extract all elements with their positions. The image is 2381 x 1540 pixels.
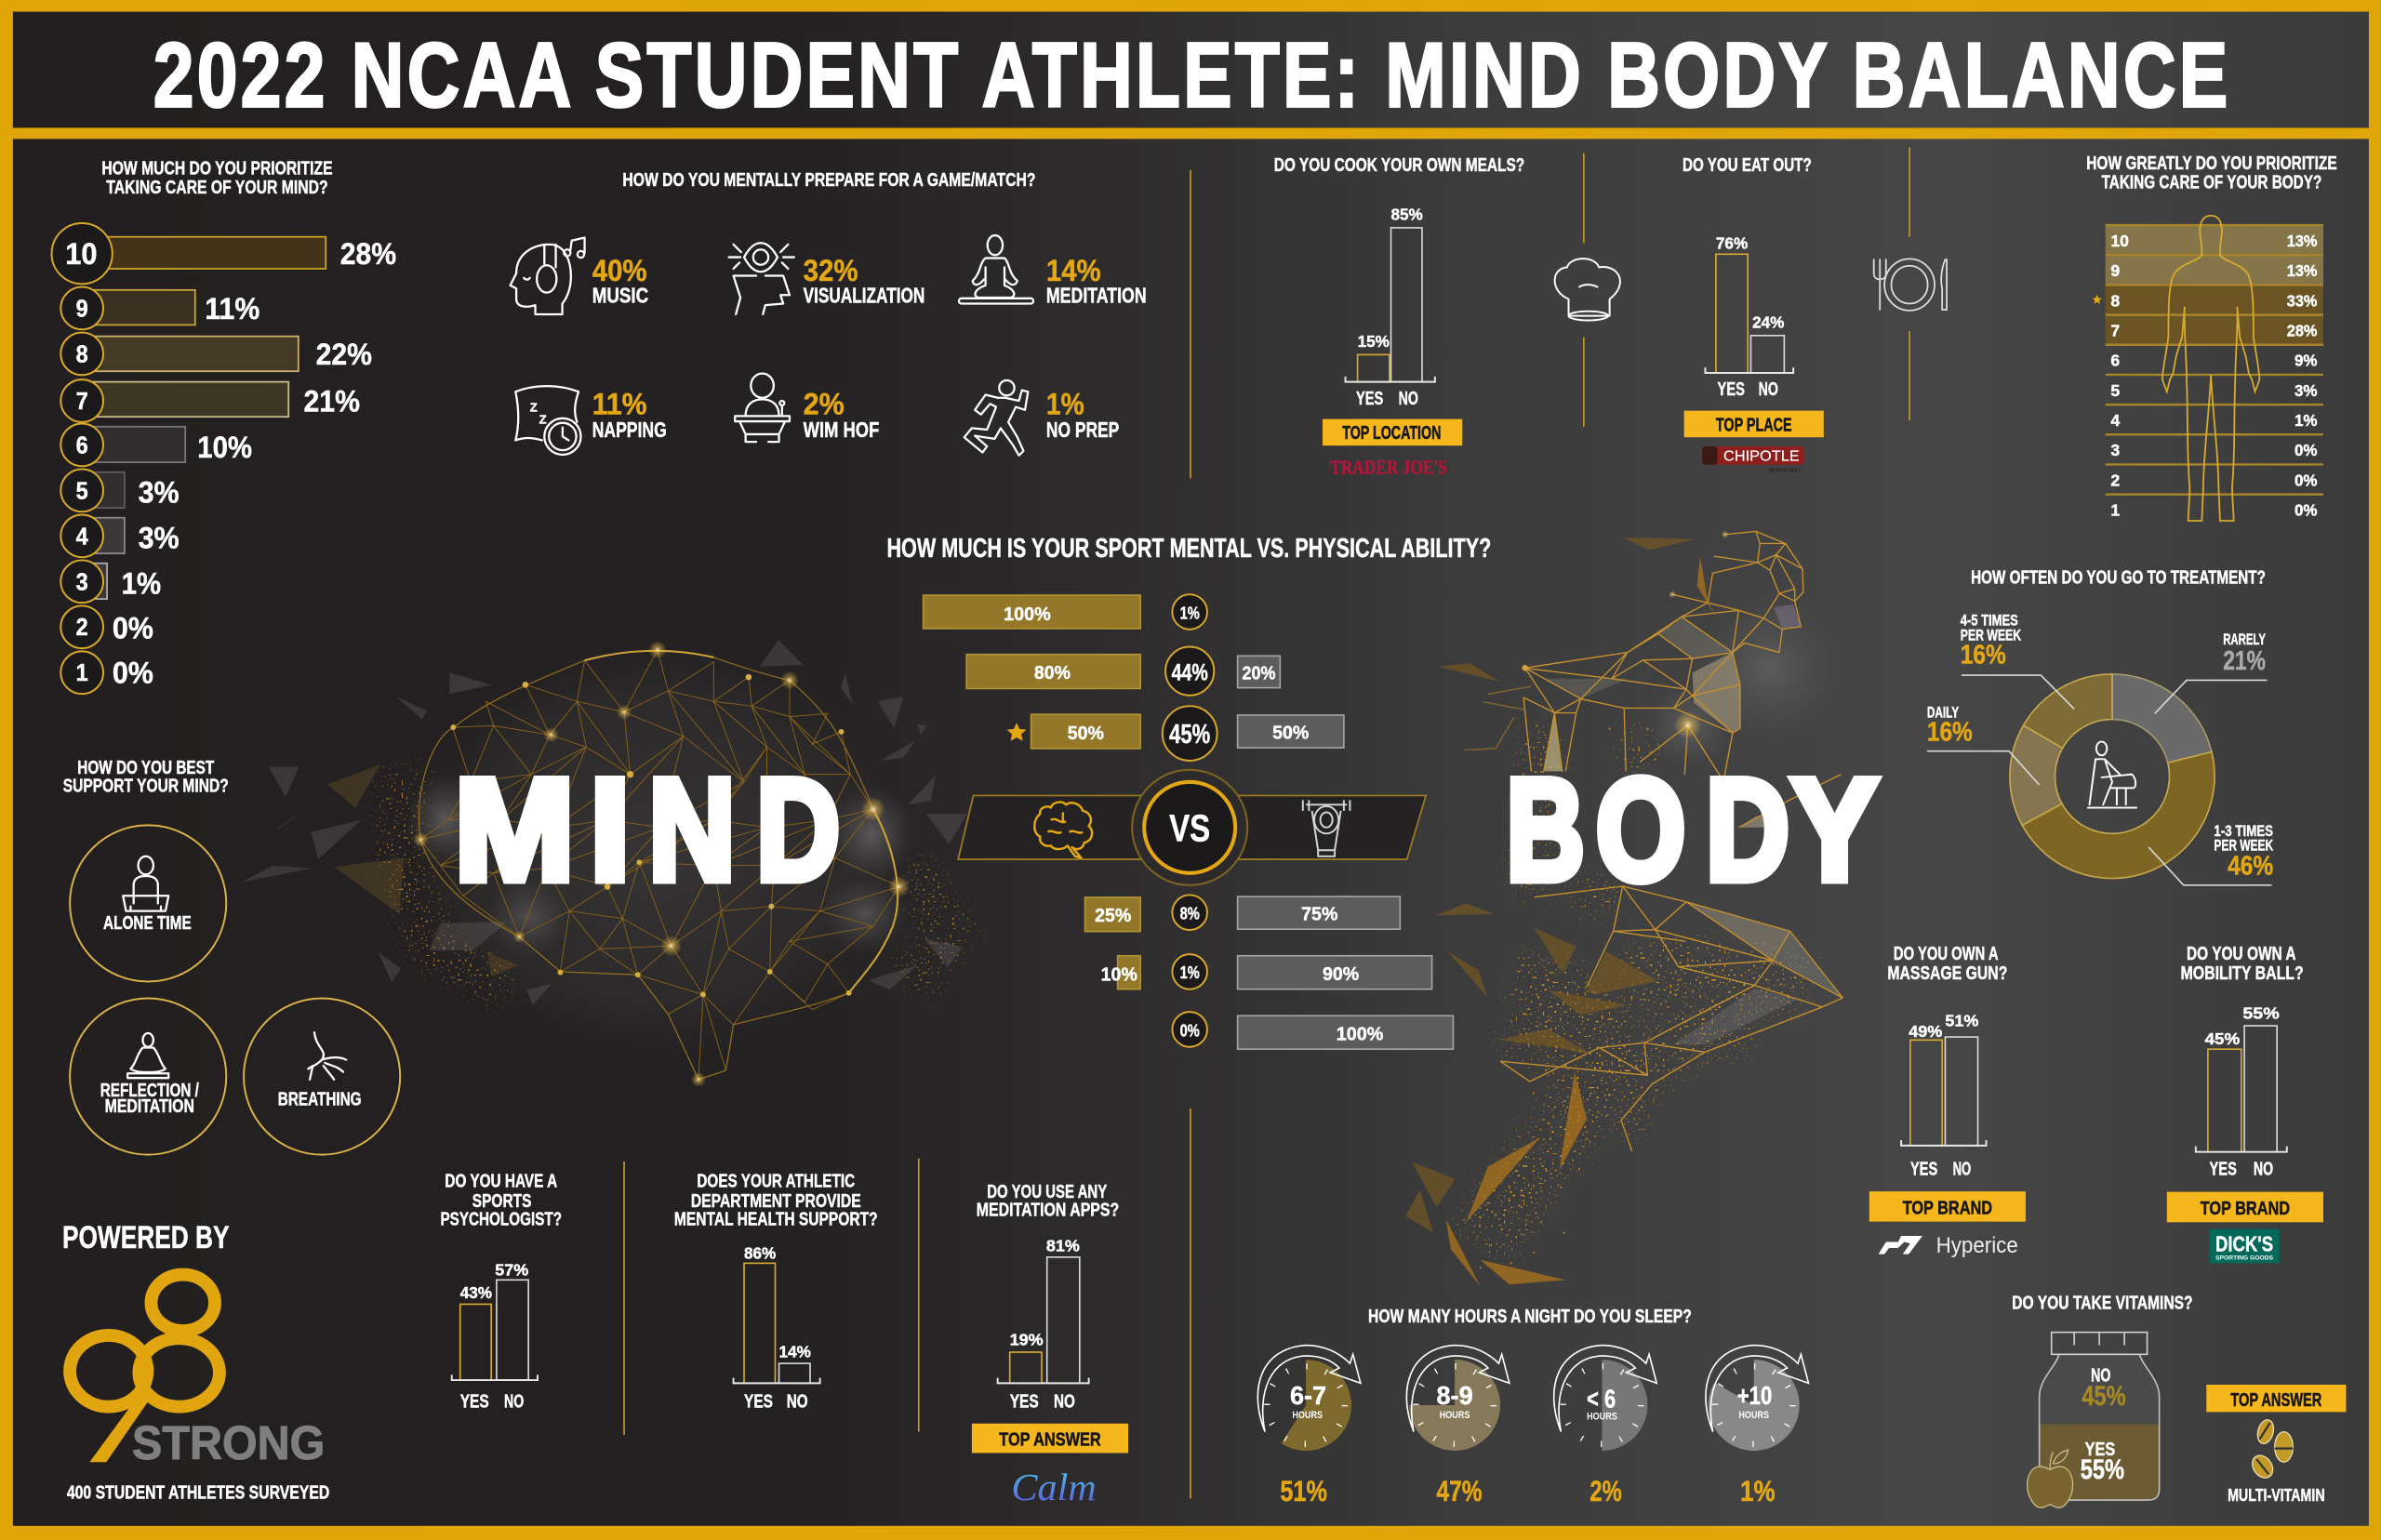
panel: prioritize body: 8 — [2110, 291, 2120, 310]
panel: prioritize mind chart: 5 — [76, 476, 88, 504]
mid percentage circles — [1163, 594, 1217, 1047]
panel: prioritize mind chart: 1% — [122, 565, 161, 600]
top brand tag: TOP BRAND — [1903, 1197, 1992, 1218]
top answer tag: TOP ANSWER — [2230, 1389, 2321, 1411]
panel: prioritize body: 6 — [2110, 352, 2120, 370]
label: 4-5 times: 16% — [1961, 640, 2006, 670]
panel: prioritize mind chart: 22% — [316, 337, 372, 371]
title: 2022 NCAA STUDENT ATHLETE: MIND BODY BALANCE — [153, 24, 2228, 126]
panel: eat out: 76% — [1716, 234, 1748, 253]
panel: cook your own meals: DO YOU COOK YOUR OWN MEALS? — [1274, 155, 1524, 176]
panel: prioritize mind chart — [52, 159, 396, 694]
panel: powered by 98 strong — [62, 1220, 329, 1503]
item: reflection / meditation: MEDITATION — [105, 1096, 194, 1117]
panel: prioritize mind chart: 1 — [76, 658, 88, 686]
panel: mental health support: 86% — [744, 1243, 776, 1262]
panel: eat out — [1683, 155, 1824, 474]
stat: music: MUSIC — [592, 284, 648, 308]
panel: prioritize body: 33% — [2287, 291, 2317, 310]
item: reflection / meditation: REFLECTION / — [100, 1081, 199, 1101]
outline — [419, 651, 898, 1080]
panel: prioritize mind chart: 3 — [76, 567, 88, 595]
mental bars: 50% — [1068, 724, 1104, 744]
panel: sports psychologist — [440, 1172, 562, 1412]
stat: visualization: VISUALIZATION — [804, 284, 924, 308]
panel: vitamins: 55% — [2081, 1454, 2124, 1485]
panel: prioritize mind chart: 7 — [76, 387, 88, 415]
stat: no prep: NO PREP — [1046, 418, 1119, 442]
panel: sports psychologist: NO — [504, 1390, 524, 1412]
illustration: polygon runner — [1405, 531, 1845, 1286]
panel: prioritize mind chart: 28% — [340, 236, 396, 271]
clock: under 6 hours — [1554, 1346, 1656, 1507]
clock: over 10 hours: HOURS — [1738, 1410, 1769, 1421]
logo: chipotle: CHIPOTLE — [1723, 449, 1800, 465]
panel: prioritize body: 3% — [2295, 381, 2317, 400]
icon: body outline — [2162, 216, 2259, 521]
clock: 8-9 hours — [1406, 1346, 1510, 1507]
clock: over 10 hours: 1% — [1740, 1475, 1776, 1507]
stat: visualization: 32% — [804, 253, 858, 287]
heading: mind priority: HOW MUCH DO YOU PRIORITIZE — [101, 159, 333, 179]
vertical dividers — [624, 147, 1909, 1498]
donut chart — [2010, 674, 2215, 879]
icon: chef hat — [1555, 259, 1620, 320]
vs banner — [958, 770, 1426, 885]
stat: music — [592, 253, 648, 308]
icon: pillow and clock: Z — [530, 400, 538, 414]
panel: eat out: YES — [1718, 378, 1745, 400]
clock: over 10 hours — [1706, 1346, 1808, 1507]
star marker — [2092, 295, 2102, 304]
logo: hyperice — [1879, 1233, 2018, 1258]
panel: treatment frequency: HOW OFTEN DO YOU GO TO TREATMENT? — [1971, 568, 2266, 589]
panel: mental preparation — [511, 170, 1147, 456]
logo: 98 strong: STRONG — [132, 1416, 325, 1469]
panel: sports psychologist: 43% — [460, 1283, 492, 1302]
clock: 8-9 hours: HOURS — [1440, 1410, 1470, 1421]
mesh lines — [1500, 531, 1842, 1151]
heading: mind priority — [101, 159, 333, 198]
panel: eat out: DO YOU EAT OUT? — [1683, 155, 1812, 176]
panel: prioritize mind chart: 3% — [139, 520, 180, 554]
mid percentage circles: 44% — [1172, 659, 1208, 685]
panel: prioritize body: 5 — [2110, 381, 2120, 400]
label: 1-3 times: 46% — [2228, 851, 2273, 881]
heading: support: SUPPORT YOUR MIND? — [63, 776, 229, 796]
panel: massage gun: NO — [1953, 1159, 1971, 1180]
stat: meditation — [1046, 253, 1147, 308]
panel: cook your own meals: NO — [1399, 388, 1418, 409]
panel: massage gun: DO YOU OWN A — [1894, 944, 1999, 964]
panel: eat out: NO — [1759, 378, 1778, 400]
mid percentage circles: 8% — [1180, 904, 1200, 923]
top place tag — [1684, 411, 1824, 437]
panel: vitamins: 45% — [2082, 1381, 2126, 1412]
panel: sports psychologist: SPORTS — [472, 1191, 531, 1212]
panel: vitamins: DO YOU TAKE VITAMINS? — [2012, 1293, 2193, 1313]
heading: mental preparation: HOW DO YOU MENTALLY PREPARE FOR A GAME/MATCH? — [622, 170, 1035, 191]
icon: massage table — [2088, 742, 2136, 808]
panel: sports psychologist: DO YOU HAVE A — [445, 1172, 557, 1192]
panel: prioritize mind chart: 3% — [139, 474, 180, 509]
stat: music: 40% — [592, 253, 647, 287]
panel: powered by 98 strong: 400 STUDENT ATHLETES SURVEYED — [67, 1482, 329, 1503]
panel: prioritize mind chart: 11% — [205, 291, 259, 325]
headline: mind word — [455, 750, 840, 910]
panel: mobility ball: MOBILITY BALL? — [2180, 963, 2304, 984]
clock: under 6 hours: HOURS — [1587, 1412, 1617, 1423]
panel: meditation apps: DO YOU USE ANY — [987, 1182, 1108, 1202]
panel: prioritize mind chart: 9 — [76, 294, 88, 322]
panel: prioritize body: 13% — [2287, 232, 2317, 250]
physical bars: 100% — [1337, 1024, 1383, 1044]
headline: body word: B — [1507, 750, 1585, 910]
panel: vitamins: MULTI-VITAMIN — [2228, 1485, 2325, 1505]
mental bars: 100% — [1004, 604, 1051, 625]
panel: eat out: 24% — [1752, 313, 1784, 332]
panel: mental health support: NO — [787, 1390, 808, 1412]
physical bars: 75% — [1301, 904, 1337, 924]
top location tag: TOP LOCATION — [1342, 422, 1441, 444]
panel: cook your own meals: 15% — [1358, 332, 1390, 351]
panel: prioritize mind chart: 10% — [197, 430, 252, 464]
panel: cook your own meals — [1274, 155, 1524, 478]
mid percentage circles: 0% — [1180, 1020, 1200, 1040]
mid percentage circles: 45% — [1169, 720, 1210, 750]
panel: massage gun: 51% — [1945, 1012, 1978, 1030]
item: reflection / meditation — [70, 998, 226, 1155]
panel: support your mind — [63, 758, 400, 1155]
stat: napping — [592, 387, 667, 442]
top answer tag — [972, 1424, 1128, 1453]
physical bars: 20% — [1243, 664, 1275, 684]
icon: pillow and clock: Z — [539, 413, 547, 427]
top answer tag: TOP ANSWER — [999, 1428, 1101, 1450]
item: breathing — [244, 998, 400, 1155]
panel: meditation apps: YES — [1010, 1390, 1039, 1412]
panel: mobility ball — [2167, 944, 2323, 1263]
stat: wim hof — [804, 387, 879, 442]
heading: mental vs physical: HOW MUCH IS YOUR SPORT MENTAL VS. PHYSICAL ABILITY? — [886, 534, 1491, 564]
heading: support — [63, 758, 229, 796]
top place tag: TOP PLACE — [1716, 415, 1792, 436]
clock: 6-7 hours: HOURS — [1292, 1410, 1323, 1421]
panel: prioritize body: 4 — [2110, 411, 2120, 430]
label: 4-5 times: PER WEEK — [1961, 627, 2021, 644]
panel: meditation apps: MEDITATION APPS? — [977, 1201, 1119, 1221]
panel: mental vs physical — [886, 534, 1491, 1049]
panel: mental health support: YES — [744, 1390, 773, 1412]
clock: 6-7 hours: 51% — [1280, 1475, 1327, 1507]
panel: sports psychologist: 57% — [495, 1260, 528, 1279]
clock: under 6 hours: 2% — [1590, 1475, 1622, 1507]
stat: meditation: 14% — [1046, 253, 1101, 287]
panel: treatment frequency — [1927, 568, 2273, 885]
panel: prioritize body: 28% — [2287, 321, 2317, 339]
heading: mind priority: TAKING CARE OF YOUR MIND? — [106, 178, 328, 198]
particles around brain and runner — [398, 729, 1807, 1245]
leader lines — [1927, 675, 2271, 885]
physical bars: 50% — [1272, 723, 1309, 743]
mid percentage circles: 1% — [1180, 603, 1200, 622]
top location tag — [1323, 419, 1462, 445]
panel: meditation apps: 81% — [1046, 1236, 1080, 1255]
headline: mind word: D — [756, 750, 840, 910]
panel: mental health support: 14% — [779, 1343, 811, 1361]
panel: prioritize mind chart: 0% — [113, 611, 153, 645]
panel: massage gun: 49% — [1909, 1022, 1942, 1041]
mental bars — [924, 595, 1140, 989]
logo: chipotle: MEXICAN GRILL — [1769, 469, 1802, 474]
panel: massage gun — [1869, 944, 2026, 1258]
physical bars — [1238, 656, 1453, 1049]
mesh lines — [420, 650, 899, 1080]
icon: brain — [1034, 802, 1092, 857]
label: 4-5 times: 4-5 TIMES — [1961, 613, 2018, 630]
panel: sleep hours: HOW MANY HOURS A NIGHT DO YOU SLEEP? — [1368, 1307, 1692, 1327]
stat: napping: 11% — [592, 387, 647, 421]
panel: prioritize body — [2086, 153, 2337, 521]
headline: mind word: M — [455, 750, 575, 910]
panel: vitamins — [2012, 1293, 2346, 1507]
panel: prioritize mind chart: 10 — [65, 236, 97, 271]
stat: no prep — [1046, 387, 1119, 442]
label: rarely: 21% — [2223, 646, 2266, 676]
stat: wim hof: WIM HOF — [804, 418, 879, 442]
panel: mobility ball: 55% — [2242, 1004, 2280, 1023]
label: rarely: RARELY — [2223, 631, 2266, 648]
stat: wim hof: 2% — [804, 387, 845, 421]
icon: vitamin jar — [2040, 1333, 2160, 1500]
icon: head with headphones — [511, 238, 585, 314]
clock: 6-7 hours: 6-7 — [1290, 1381, 1326, 1410]
panel: prioritize body: 13% — [2287, 261, 2317, 280]
panel: mobility ball: YES — [2210, 1159, 2237, 1180]
headline: mind word: N — [648, 750, 736, 910]
panel: vitamins: YES — [2085, 1439, 2115, 1460]
stat: meditation: MEDITATION — [1046, 284, 1147, 308]
logo: dick's — [2210, 1229, 2280, 1263]
panel: prioritize body: 0% — [2295, 441, 2317, 459]
label: rarely — [2223, 631, 2266, 676]
header band — [13, 12, 2369, 127]
panel: prioritize body: 10 — [2110, 232, 2129, 250]
panel: prioritize body: 0% — [2295, 471, 2317, 489]
stat: no prep: 1% — [1046, 387, 1084, 421]
label: daily: DAILY — [1927, 705, 1959, 722]
mental bars: 10% — [1101, 965, 1137, 986]
panel: massage gun: YES — [1910, 1159, 1937, 1180]
mental bars: 80% — [1034, 663, 1071, 684]
clock: 8-9 hours: 47% — [1436, 1475, 1482, 1507]
clock: 8-9 hours: 8-9 — [1436, 1381, 1473, 1410]
panel: prioritize body: 1 — [2110, 500, 2120, 519]
logo: hyperice: Hyperice — [1936, 1233, 2018, 1258]
icon: visualization head and eye — [729, 243, 794, 314]
headline: body word: Y — [1791, 750, 1878, 910]
item: alone time — [70, 825, 226, 982]
panel: mobility ball: 45% — [2205, 1029, 2240, 1048]
panel: meditation apps: 19% — [1010, 1331, 1044, 1349]
logo: dick's: DICK'S — [2215, 1231, 2273, 1255]
top brand tag: TOP BRAND — [2201, 1198, 2290, 1219]
panel: massage gun: MASSAGE GUN? — [1887, 963, 2007, 984]
illustration: polygon brain — [242, 638, 967, 1087]
panel: vitamins: NO — [2091, 1365, 2110, 1387]
physical bars: 90% — [1323, 964, 1359, 985]
panel: sports psychologist: PSYCHOLOGIST? — [440, 1210, 562, 1230]
panel: powered by 98 strong: POWERED BY — [62, 1220, 230, 1255]
icon: pillow and clock — [515, 386, 580, 455]
item: breathing: BREATHING — [278, 1090, 362, 1110]
label: daily — [1927, 705, 1973, 748]
vs banner: VS — [1169, 806, 1210, 849]
heading: body priority — [2086, 153, 2337, 192]
headline: body word: D — [1706, 750, 1789, 910]
mental bars: 25% — [1095, 906, 1131, 926]
panel: prioritize mind chart: 6 — [76, 431, 88, 458]
top answer tag — [2206, 1385, 2346, 1412]
clock: under 6 hours: < 6 — [1587, 1384, 1616, 1413]
logo: trader joe's: TRADER JOE'S — [1330, 456, 1447, 478]
icon: pills — [2248, 1418, 2293, 1481]
panel: prioritize body: 9 — [2110, 261, 2120, 280]
clock: over 10 hours: +10 — [1737, 1381, 1772, 1410]
logo: dick's: SPORTING GOODS — [2215, 1255, 2274, 1261]
clock: 6-7 hours — [1257, 1346, 1361, 1507]
panel: sleep hours — [1257, 1307, 1808, 1507]
label: 1-3 times: PER WEEK — [2214, 837, 2273, 854]
panel: prioritize body: 1% — [2295, 411, 2317, 430]
panel: mental health support: MENTAL HEALTH SUPPORT? — [674, 1210, 878, 1230]
label: 4-5 times — [1961, 613, 2021, 670]
panel: prioritize mind chart: 21% — [304, 383, 360, 418]
panel: prioritize body: 7 — [2110, 321, 2120, 339]
facets — [1693, 653, 1740, 733]
panel: prioritize mind chart: 4 — [76, 522, 88, 550]
panel: prioritize mind chart: 8 — [76, 339, 88, 367]
star marker — [1007, 723, 1027, 741]
panel: mobility ball: DO YOU OWN A — [2187, 944, 2296, 964]
headline: body word — [1507, 750, 1878, 910]
mid percentage circles: 1% — [1180, 962, 1200, 982]
panel: prioritize body: 0% — [2295, 500, 2317, 519]
panel: prioritize body: 9% — [2295, 352, 2317, 370]
label: 1-3 times — [2214, 823, 2273, 881]
heading: support: HOW DO YOU BEST — [77, 758, 215, 778]
stat: napping: NAPPING — [592, 418, 667, 442]
panel: prioritize mind chart: 2 — [76, 613, 88, 641]
panel: sports psychologist: YES — [460, 1390, 489, 1412]
icon: meditation figure — [959, 235, 1033, 304]
logo: chipotle — [1702, 446, 1804, 474]
panel: mental health support — [674, 1172, 878, 1412]
icon: plate and cutlery — [1874, 259, 1947, 311]
label: 1-3 times: 1-3 TIMES — [2214, 823, 2273, 840]
logo: calm: Calm — [1011, 1467, 1097, 1508]
panel: prioritize mind chart: 0% — [113, 656, 153, 690]
brown shards — [1405, 538, 1696, 1233]
panel: mobility ball: NO — [2254, 1159, 2273, 1180]
headline: mind word: I — [590, 750, 630, 910]
panel: cook your own meals: 85% — [1391, 206, 1423, 224]
panel: mental health support: DOES YOUR ATHLETIC — [697, 1172, 855, 1192]
panel: meditation apps — [972, 1182, 1128, 1508]
stat: visualization — [804, 253, 924, 308]
panel: meditation apps: NO — [1054, 1390, 1075, 1412]
top brand tag — [1869, 1191, 2026, 1222]
panel: cook your own meals: YES — [1356, 388, 1383, 409]
icon: weight press — [1303, 800, 1350, 856]
label: daily: 16% — [1927, 718, 1973, 748]
panel: prioritize body: 3 — [2110, 441, 2120, 459]
panel: mental health support: DEPARTMENT PROVIDE — [691, 1191, 861, 1212]
top brand tag — [2167, 1192, 2323, 1222]
logo: 98 strong — [70, 1275, 325, 1469]
headline: body word: O — [1596, 750, 1685, 910]
item: alone time: ALONE TIME — [103, 913, 192, 934]
icon: person at wim hof breathing — [735, 374, 790, 442]
panel: prioritize body: 2 — [2110, 471, 2120, 489]
icon: running figure — [964, 380, 1028, 456]
icon: apple — [2028, 1450, 2073, 1507]
